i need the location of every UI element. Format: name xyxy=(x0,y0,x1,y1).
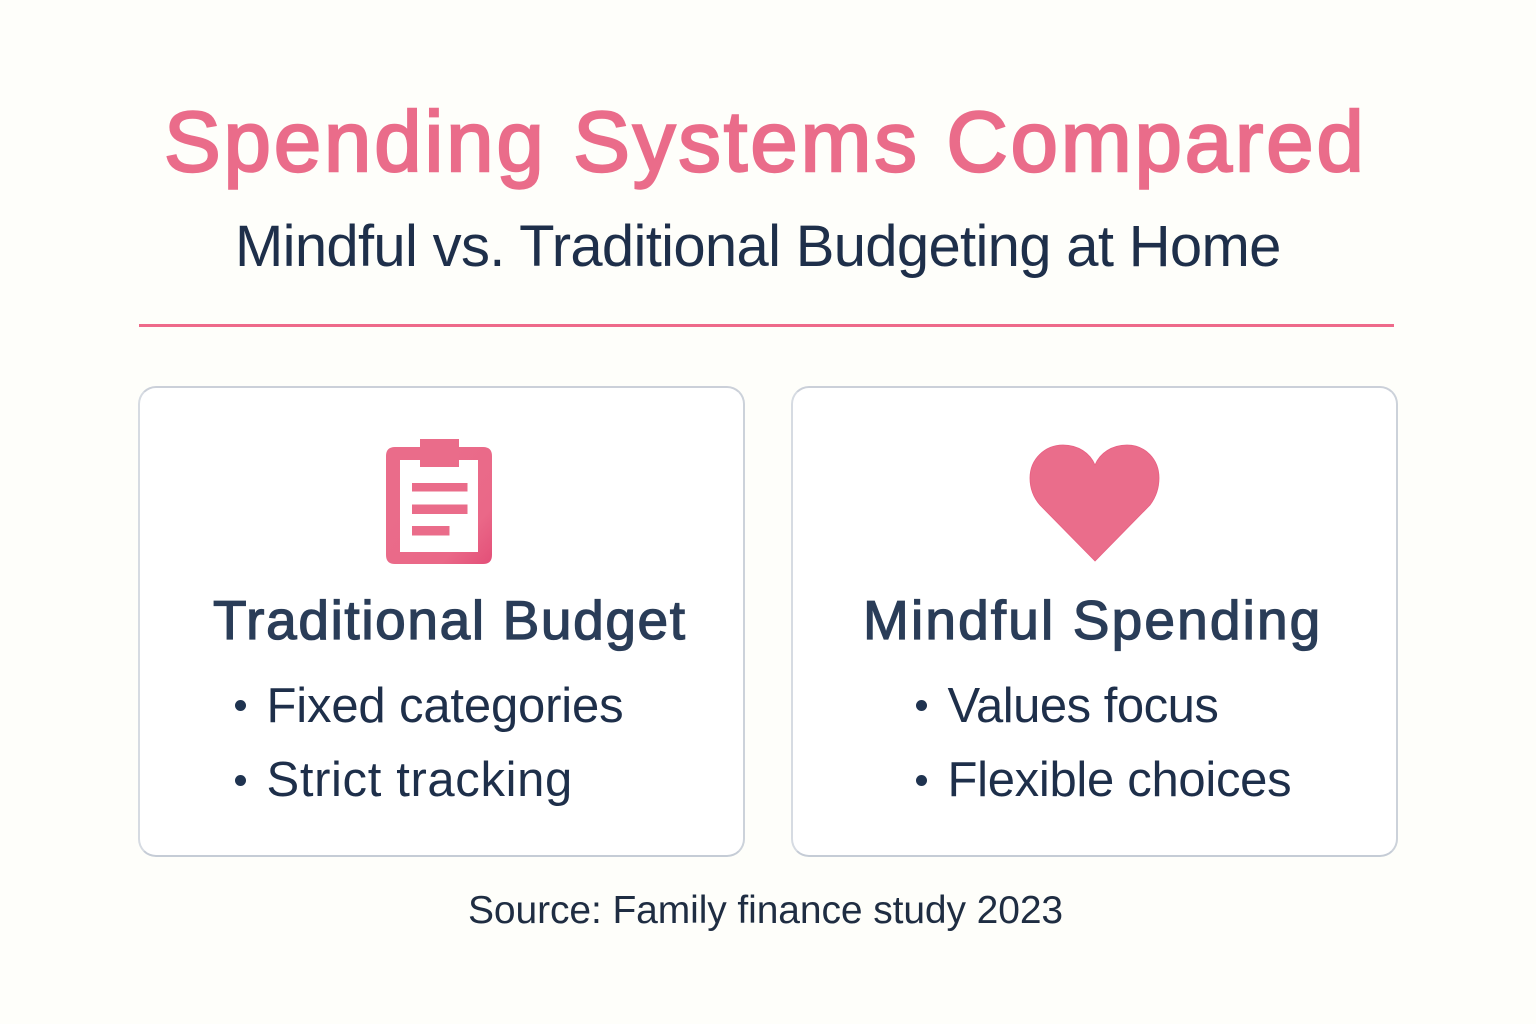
panel: mindful spending xyxy=(791,386,1398,857)
divider line xyxy=(139,324,1394,327)
panel: traditional budget xyxy=(138,386,745,857)
list: traditional budget points xyxy=(235,678,623,807)
icon: clipboard xyxy=(386,439,492,564)
heading: mindful spending: Mindful Spending xyxy=(863,589,1322,651)
list: mindful spending points xyxy=(916,678,1291,807)
bullet 2 xyxy=(234,775,246,786)
source note: Source: Family finance study 2023 xyxy=(468,889,1063,932)
item: strict tracking: Strict tracking xyxy=(266,753,573,807)
item: values focus: Values focus xyxy=(948,678,1218,732)
item: flexible choices: Flexible choices xyxy=(948,753,1291,807)
icon: heart xyxy=(1030,444,1160,562)
bullet 1 xyxy=(916,700,926,711)
heading: traditional budget: Traditional Budget xyxy=(213,589,687,651)
bullet 1 xyxy=(234,700,246,711)
bullet 2 xyxy=(916,775,926,786)
item: fixed categories: Fixed categories xyxy=(266,678,623,732)
title: Spending Systems Compared xyxy=(164,95,1367,190)
subtitle: Mindful vs. Traditional Budgeting at Home xyxy=(235,214,1281,279)
